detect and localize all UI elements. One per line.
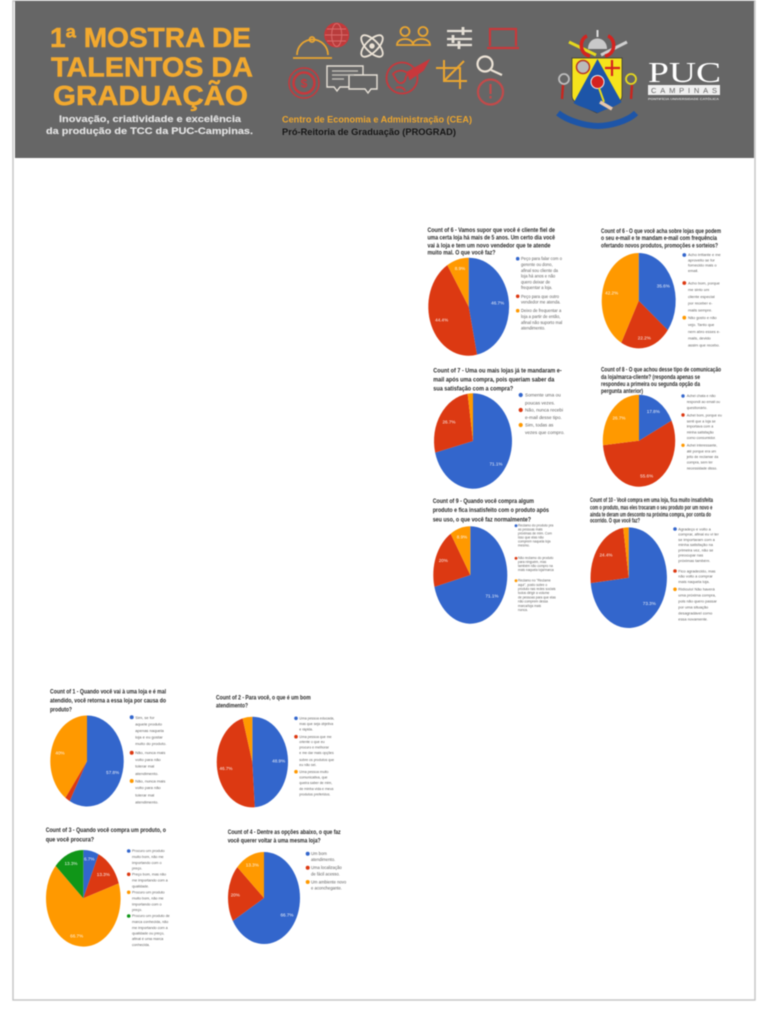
legend: Peço para falar com o [521,256,563,261]
legend [519,393,565,435]
title [50,22,253,111]
legend: de fácil acesso. [311,872,340,876]
legend: essa novamente. [678,617,708,622]
legend [306,851,347,890]
legend: Acho irritante e me [688,252,721,257]
subtitle: Inovação, criatividade e excelência [59,114,242,124]
chart title: Count of 8 - O que achou desse tipo de comunicação [601,366,721,374]
pie chart: 42.2% [605,290,618,295]
legend: mails, devido [688,336,711,341]
legend: atendimento. [521,326,545,331]
legend: Procuro um produto [132,890,165,894]
organizers: Centro de Economia e Administração (CEA) [282,114,472,124]
legend: Procuro um produto [132,849,165,853]
organizers [282,114,472,137]
panel: chart question 9 dissatisfied with product [433,498,556,624]
chart title [216,694,311,710]
legend: vendedor me atenda. [521,300,561,305]
icon: people [397,27,430,45]
chart title [428,227,555,256]
legend: marca conhecida, não [132,920,168,924]
chart title: o seu e-mail e te mandam e-mail com frequência [601,235,717,242]
PUC Campinas logo: PUC [648,58,721,89]
legend: importando com o [132,902,162,906]
legend: volto para não [135,757,161,762]
chart title: ocorrido. O que você faz? [590,518,640,525]
PUC Campinas logo: CAMPINAS [651,86,717,95]
legend: e me dar mais opções [299,751,334,755]
chart title: Count of 1 - Quando você vai à uma loja e é mal [50,688,166,695]
PUC Campinas logo: PONTIFÍCIA UNIVERSIDADE CATÓLICA [648,96,720,101]
legend: loja a partir de então, [521,314,560,319]
pie chart [603,395,675,487]
legend: compra, sem ter [687,461,713,465]
legend [515,524,556,612]
chart title: Count of 9 - Quando você compra algum [433,498,534,505]
legend: questionário. [687,406,707,410]
title: 1ª MOSTRA DE [50,22,251,53]
pie chart [602,253,676,348]
legend: tolerar mal [135,792,154,798]
chart title [601,228,721,250]
legend: Somente uma ou [525,393,561,398]
legend: Uma pessoa educada, [299,716,334,720]
chart title: atendido, você retorna a essa loja por causa do [50,697,166,704]
header banner [15,1,754,158]
legend [127,849,170,947]
legend: mesmo. [518,544,530,548]
pie chart [217,717,288,807]
legend: de pessoas para que elas [518,595,556,599]
legend: jeito de reclamar da [686,455,718,459]
pie chart: 55.6% [640,474,653,479]
legend: Sim, se for [135,715,155,720]
legend: afinal é uma marca [132,937,164,941]
legend: atendimento. [311,857,335,862]
pie chart: 48.9% [272,759,285,764]
chart title: atendimento? [216,703,248,710]
legend: uma próxima compra, [678,593,716,598]
chart title [228,829,341,845]
legend: oriente o que eu [299,740,325,744]
pie chart [428,258,509,356]
legend: minha satisfação na [678,542,714,547]
chart title: seu uso, o que você faz normalmente? [433,516,531,523]
pie chart: 57.8% [106,770,119,775]
icon: dollar coin: $ [301,76,308,90]
legend: também não compro na [518,564,553,568]
icon: warning circle [478,80,503,104]
icon: coat of arms [558,30,636,126]
chart title: respondeu a primeira ou segunda opção da [601,381,700,388]
legend: Acho bom, porque [688,280,720,286]
chart title: que você procura? [46,836,94,843]
legend: frequentar a loja. [521,285,552,290]
title: TALENTOS DA [51,52,253,82]
legend: afinal sou cliente da [521,268,559,273]
panel: chart question 2 good service [216,694,334,807]
legend: me importando com a [132,878,169,882]
chart title: ofertando novos produtos, promoções e sorteios? [601,242,718,250]
legend: mais naquela loja. [678,579,710,584]
pie chart: 20% [231,892,240,897]
legend: como consumidor. [687,436,716,440]
legend: Uma localização [311,865,342,870]
chart title: mail após uma compra, pois queriam saber da [433,376,555,384]
legend: Não, nunca recebi [525,408,563,413]
legend: sobre os produtos que [299,758,334,762]
legend: respondi ao email ou [687,400,720,404]
legend: Ridículo! Não haverá [678,587,715,592]
legend: mails sempre. [688,308,712,312]
pie chart: 26.7% [612,415,626,420]
pie chart [50,716,124,806]
legend: produtos preferidos. [299,792,330,796]
chart title: Count of 2 - Para você, o que é um bom [216,694,311,701]
legend: Achei bom, porque eu [687,413,722,417]
legend: muito bom, não me [132,896,164,900]
icon: cloche [293,37,332,58]
legend: eu não sei. [299,763,316,767]
title: GRADUAÇÃO [53,80,248,111]
icon: globe with plane [386,61,428,94]
PUC Campinas logo [648,58,721,101]
legend: importava com a [687,425,713,429]
pie chart: 22.2% [638,336,651,341]
chart title: sua satisfação com a compra? [433,386,513,392]
chart title [590,497,713,525]
panel: chart question 5 store loyalty [428,227,563,356]
legend: tolerar mal [135,764,154,768]
pie chart: 40% [55,750,65,755]
icon: dollar coin [289,68,319,98]
icon: laptop [487,29,519,48]
legend: Uma pessoa que me [299,735,332,739]
legend: mas que seja objetiva [299,722,333,726]
chart title: pergunta anterior) [601,388,643,395]
icon: atom [358,32,386,60]
legend: Não reclamo do produto [518,556,554,560]
legend: Deixo de frequentar a [521,308,562,313]
legend: marca/loja mais [518,604,541,608]
legend: comprar, afinal eu vi ter [678,532,719,536]
legend: cliente especial [688,294,715,299]
legend: Um ambiente novo [311,880,347,884]
pie chart: 73.3% [643,601,656,606]
legend: não comprem dessa [518,600,548,604]
chart title: Count of 7 - Uma ou mais lojas já te mandaram e- [433,368,562,374]
legend: aquele produto [135,722,163,726]
legend: muito do produto. [135,741,166,746]
legend: as pessoas mais [518,528,543,532]
legend: me sinto um [688,287,709,292]
legend: Sim, todas as [525,423,554,428]
legend: procuro e melhorar [299,746,330,750]
pie chart: 24.4% [599,553,613,558]
legend: me importando com a [132,926,169,930]
icon: globe [325,24,348,46]
legend: e rápida. [299,727,313,731]
legend: email. [688,268,698,273]
legend: muito bom, não me [132,855,164,859]
legend: Fico agradecido, mas [678,568,716,573]
icon: sliders [447,27,472,49]
legend: Não, nunca mais [135,750,165,755]
pie chart: 20% [439,558,448,563]
legend: Preço bom, mas não [132,872,166,876]
legend: Peço para que outro [521,294,560,299]
chart title [601,366,721,395]
pie chart: 35.6% [657,283,670,288]
legend: Não gosto e não [688,315,717,320]
icon: magnifier [478,56,502,75]
legend: comunicativa, que [299,776,328,780]
legend [681,394,722,470]
chart title [50,688,166,713]
chart title [46,827,166,843]
pie chart: 46.7% [491,301,504,306]
panel: chart question 10 product replaced [590,497,719,628]
legend: Um bom [311,851,327,856]
legend: nunca. [518,608,528,612]
legend: atendimento. [135,771,158,776]
panel: chart question 6 promotional email [601,228,721,348]
pie chart: 13.3% [246,863,259,868]
legend: atendimento. [135,800,158,804]
legend: gerente ou dono, [521,262,553,267]
pie chart: 13.3% [97,872,110,877]
legend: vejo. Tanto que [688,322,714,327]
legend: qualidade ou preço, [132,932,164,936]
chart title: uma certa loja há mais de 5 anos. Um certo dia você [428,234,555,242]
pie chart: 17.8% [647,409,660,414]
pie chart: 6.7% [84,857,95,862]
chart title: produto e fica insatisfeito com o produto após [433,507,549,514]
legend: preocupar nas [678,552,703,558]
legend: Uma pessoa muito [299,770,329,774]
chart title: Count of 10 - Você compra em uma loja, fica muito insatisfeita [590,497,713,504]
legend: vezes que compro. [525,430,565,435]
pie chart: 13.3% [64,861,78,866]
panel: chart question 4 why come back [228,829,347,944]
subtitle: da produção de TCC da PUC-Campinas. [46,126,253,136]
legend: Procuro um produto de [132,914,170,918]
legend: minha satisfação [687,430,714,434]
legend: qualidade. [132,884,149,888]
panel: chart question 3 what you look for [46,827,170,947]
legend: Reclamo do produto pra [518,524,554,528]
legend: importando com o [132,861,162,865]
legend [673,526,719,622]
legend: quero deixar de [521,279,551,284]
legend: Reclamo no "Reclame [518,579,551,583]
chart title: produto? [50,706,72,713]
chart title [433,498,549,523]
legend: queira saber de mim, [299,781,332,785]
legend: desagradável como [678,611,712,616]
legend: mais naquela loja/marca [518,568,554,572]
pie chart [434,393,512,489]
organizers: Pró-Reitoria de Graduação (PROGRAD) [282,127,456,137]
legend: Agradeço e volto a [678,526,712,531]
legend: loja e eu gostar [135,734,163,740]
panel: chart question 8 communication opinion [601,366,722,487]
legend: poucas vezes. [525,400,555,405]
legend: e-mail desse tipo. [525,415,562,420]
legend: e aconchegante. [311,886,342,890]
legend: conhecida. [132,943,150,947]
legend: fornecido mais o [688,263,717,268]
panel: chart question 1 return after bad service [50,688,166,806]
legend: produto nas redes sociais [518,587,556,591]
pie chart [46,850,121,947]
chart title: Count of 3 - Quando você compra um produto, o [46,827,166,834]
legend [294,716,334,796]
legend: por uma situação [678,605,708,610]
chart title [433,368,562,392]
chart title: da loja/marca-cliente? (responda apenas se [601,374,700,381]
legend: afinal não suporto mal [521,320,562,325]
panel: chart question 7 satisfaction email [433,368,565,489]
pie chart: 8.9% [457,535,467,540]
pie chart: 71.1% [485,594,499,599]
pie chart: 66.7% [280,913,294,918]
legend [682,252,721,347]
legend [130,715,166,804]
chart title: Count of 6 - Vamos supor que você é cliente fiel de [428,227,555,234]
icon: crop [436,60,467,89]
legend: até porque era um [687,450,716,454]
pie chart: 46.7% [219,766,233,771]
legend: não volto a comprar [678,574,713,579]
pie chart: 71.1% [489,462,503,467]
legend: comprem naquela loja [518,540,551,544]
chart title: vai à loja e tem um novo vendedor que te atende [428,242,551,250]
icon: chat bubbles [327,66,377,93]
legend [516,256,563,331]
legend: todos dirigir a volume [518,591,550,595]
legend: próximas também. [678,558,710,563]
legend: preço. [132,867,142,871]
chart title: muito mal. O que você faz? [428,250,496,256]
legend: assim que recebo. [688,342,720,347]
legend: primeira vez, não se [678,547,713,552]
legend: apenas naquela [135,728,165,733]
pie chart: 26.7% [442,419,456,424]
legend: Não, nunca mais [135,778,165,784]
pie chart [433,526,507,624]
legend: senti que a loja se [687,419,716,423]
legend: nem abro esses e- [688,329,721,334]
legend: aqui", posto sobre o [518,583,547,587]
pie chart: 8.9% [455,266,465,271]
legend: pois não quero passar [678,599,718,604]
legend: preço. [132,908,142,912]
legend: Achei chata e não [687,394,715,398]
legend: aproveito se for [688,257,716,262]
legend: necessidade disso. [687,466,717,470]
chart title: Count of 4 - Dentre as opções abaixo, o que faz [228,829,341,836]
pie chart: 66.7% [70,933,83,938]
subtitle [46,114,253,136]
pie chart: 44.4% [435,318,448,323]
legend: loja há anos e não [521,274,556,279]
pie chart [228,852,300,944]
legend: isso que elas não [518,536,544,540]
legend: de minha vida e meus [299,787,334,791]
pie chart [591,527,667,628]
legend: por receber e- [688,301,713,306]
legend: Achei interessante, [687,444,717,448]
legend: se importaram com a [678,537,716,542]
chart title: você querer voltar à uma mesma loja? [228,838,321,845]
legend: para ninguém, mas [518,560,547,564]
legend: próximas de mim. Com [518,532,552,536]
chart title: Count of 6 - O que você acha sobre lojas que podem [601,228,721,235]
legend: volto para não [135,785,161,790]
